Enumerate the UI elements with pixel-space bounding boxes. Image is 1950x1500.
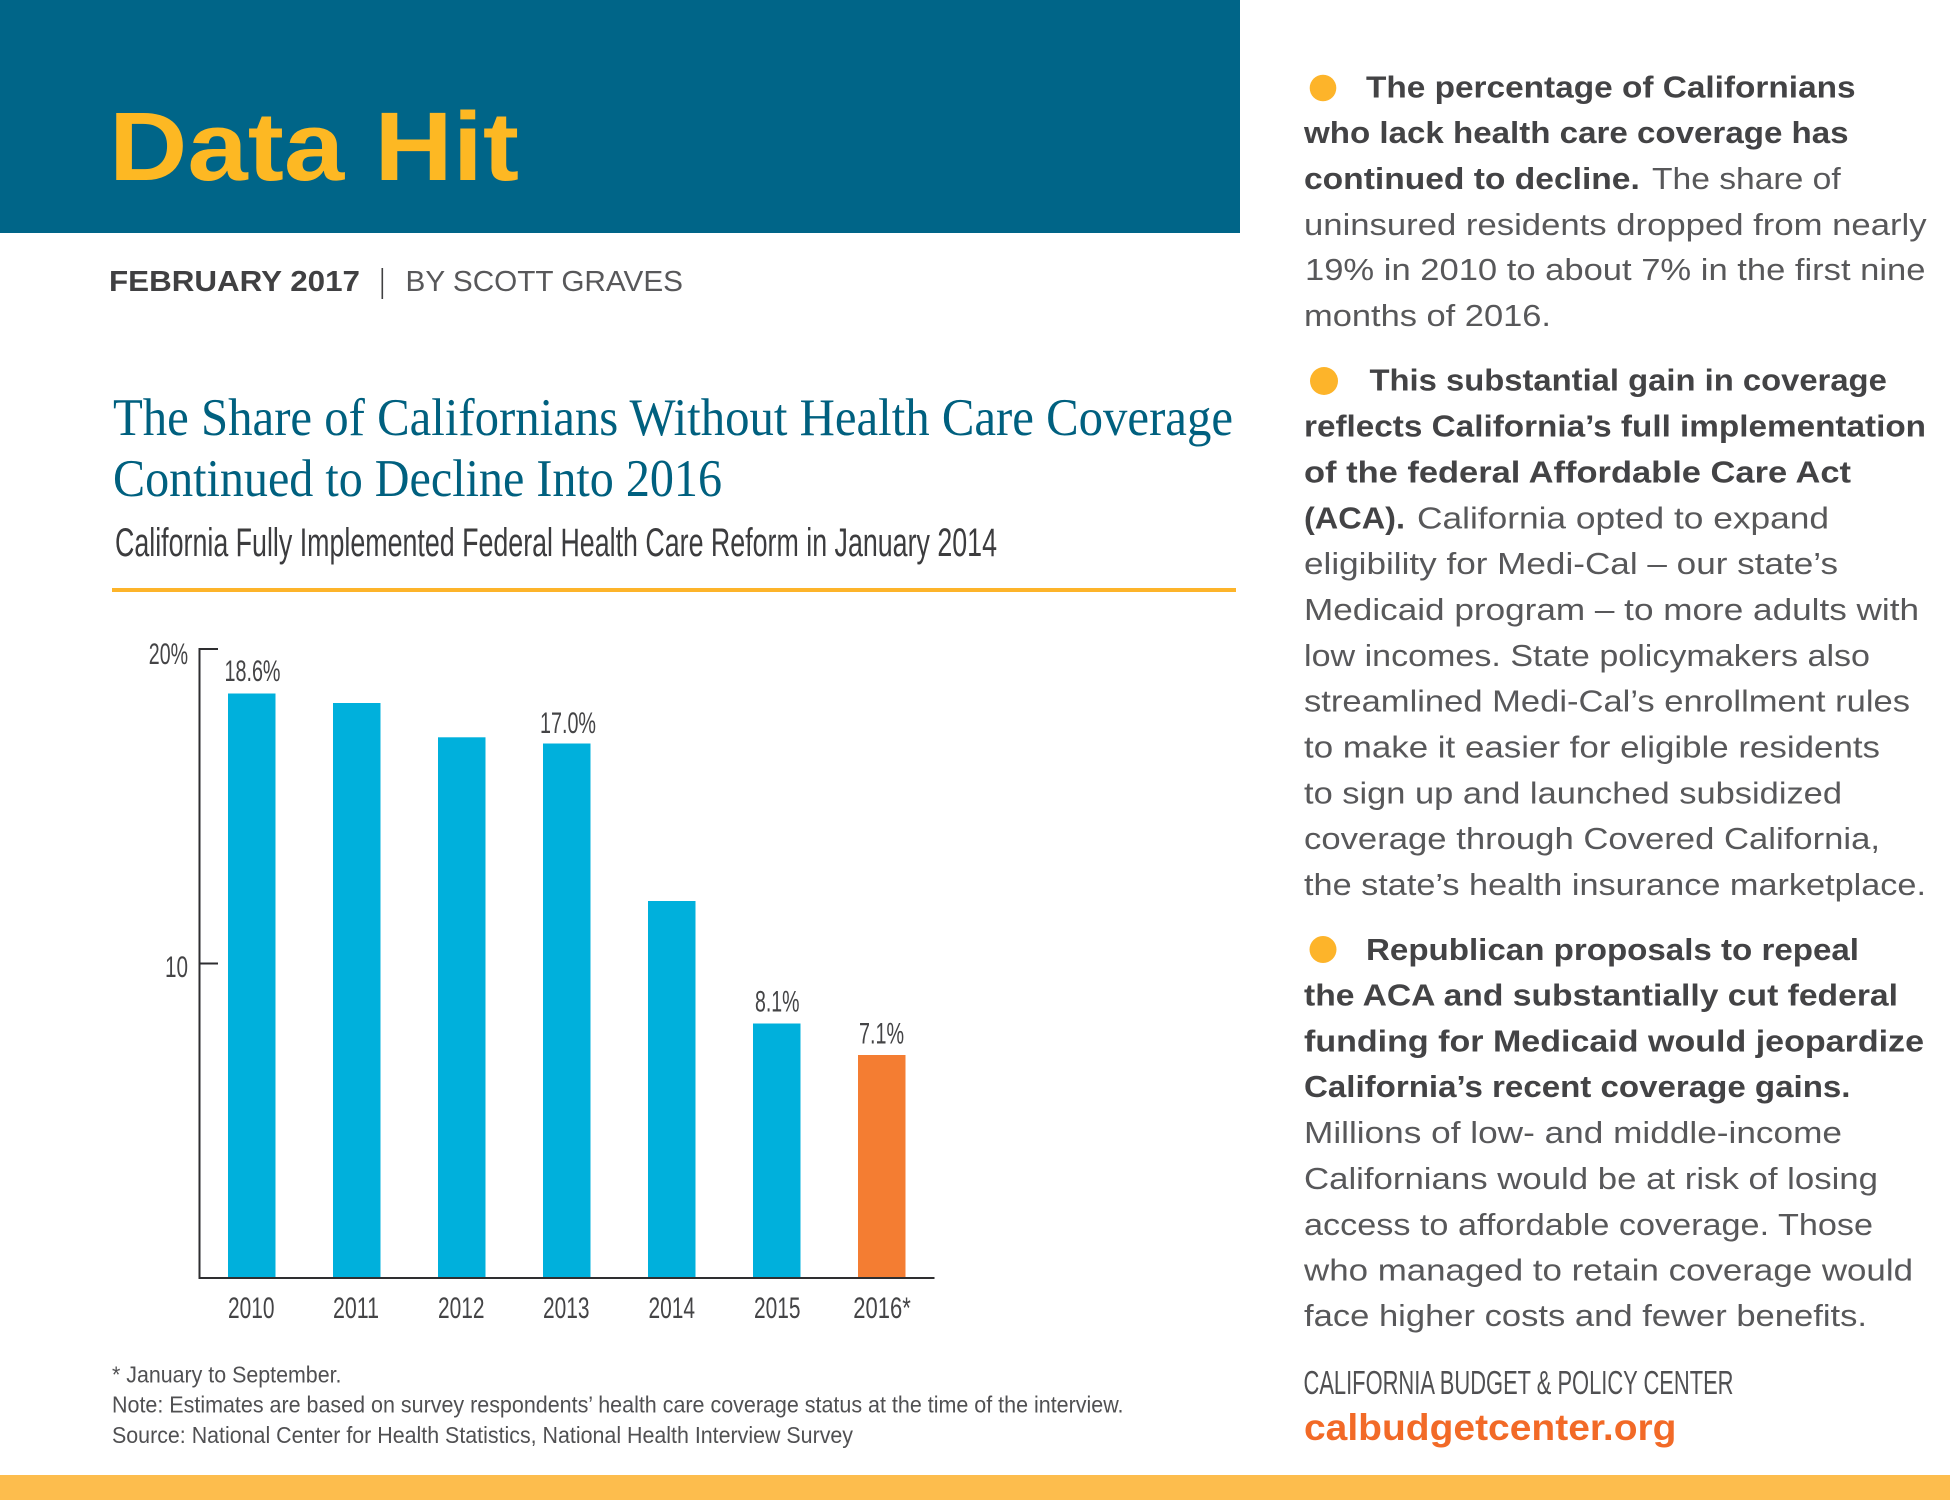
bullet 2 — [1310, 367, 1338, 395]
date and byline: FEBRUARY 2017 — [109, 266, 360, 298]
value labels: 8.1% — [755, 986, 800, 1019]
paragraph 2: the state’s health insurance marketplace. — [1304, 868, 1926, 902]
year labels: 2014 — [648, 1292, 695, 1325]
paragraph 2: Medicaid program – to more adults with — [1304, 593, 1919, 627]
paragraph 3: face higher costs and fewer benefits. — [1304, 1299, 1867, 1333]
paragraph 2: to sign up and launched subsidized — [1304, 776, 1842, 810]
year labels: 2011 — [333, 1292, 379, 1325]
website: calbudgetcenter.org — [1304, 1407, 1676, 1448]
value labels — [224, 655, 904, 1051]
bar chart — [149, 638, 935, 1325]
y axis: 10 — [165, 951, 188, 984]
chart title: Continued to Decline Into 2016 — [113, 450, 722, 508]
footnotes: Source: National Center for Health Statistics, National Health Interview Survey — [112, 1422, 853, 1448]
paragraph 2: coverage through Covered California, — [1304, 822, 1880, 856]
paragraph 3 — [1303, 933, 1924, 1333]
paragraph 2: eligibility for Medi-Cal – our state’s — [1304, 547, 1838, 581]
paragraph 1: continued to decline. — [1304, 162, 1640, 196]
date and byline: BY SCOTT GRAVES — [406, 266, 683, 298]
paragraph 3: Millions of low- and middle-income — [1304, 1116, 1842, 1150]
paragraph 2: of the federal Affordable Care Act — [1304, 455, 1851, 489]
y axis: 20% — [149, 638, 188, 671]
organization name: CALIFORNIA BUDGET & POLICY CENTER — [1304, 1364, 1734, 1401]
footnotes — [112, 1362, 1124, 1448]
year labels: 2012 — [438, 1292, 484, 1325]
value labels: 17.0% — [540, 707, 596, 740]
footnotes: * January to September. — [112, 1362, 342, 1388]
bars — [228, 694, 906, 1278]
paragraph 1: who lack health care coverage has — [1303, 116, 1849, 150]
paragraph 2: to make it easier for eligible residents — [1304, 730, 1880, 764]
paragraph 2: streamlined Medi-Cal’s enrollment rules — [1304, 685, 1910, 719]
chart subtitle: California Fully Implemented Federal Health Care Reform in January 2014 — [115, 521, 997, 565]
year labels: 2016* — [853, 1292, 911, 1325]
bottom band — [0, 1475, 1950, 1500]
paragraph 2: low incomes. State policymakers also — [1304, 639, 1870, 673]
paragraph 2: (ACA). — [1304, 501, 1405, 535]
bullet 1 — [1310, 75, 1336, 101]
paragraph 3: the ACA and substantially cut federal — [1304, 978, 1898, 1012]
paragraph 3: access to affordable coverage. Those — [1304, 1208, 1873, 1242]
year labels: 2010 — [228, 1292, 274, 1325]
paragraph 1: The share of — [1652, 162, 1841, 196]
paragraph 3: funding for Medicaid would jeopardize — [1304, 1024, 1924, 1058]
paragraph 3: Republican proposals to repeal — [1366, 933, 1859, 967]
paragraph 2: This substantial gain in coverage — [1370, 364, 1887, 398]
paragraph 1: months of 2016. — [1304, 299, 1551, 333]
chart title: The Share of Californians Without Health Care Coverage — [113, 389, 1233, 447]
chart title — [113, 389, 1233, 508]
paragraph 1 — [1303, 70, 1927, 333]
bullet 3 — [1310, 936, 1336, 963]
paragraph 3: California’s recent coverage gains. — [1304, 1070, 1850, 1104]
year labels: 2015 — [754, 1292, 800, 1325]
year labels — [228, 1292, 911, 1325]
year labels: 2013 — [543, 1292, 590, 1325]
header banner — [0, 0, 1240, 233]
value labels: 7.1% — [859, 1018, 904, 1051]
value labels: 18.6% — [224, 655, 280, 688]
x axis — [198, 1277, 934, 1279]
paragraph 3: who managed to retain coverage would — [1303, 1254, 1913, 1288]
paragraph 3: Californians would be at risk of losing — [1304, 1162, 1878, 1196]
paragraph 2: reflects California’s full implementation — [1304, 410, 1926, 444]
date and byline — [109, 266, 683, 299]
paragraph 2: California opted to expand — [1417, 501, 1829, 535]
y axis — [149, 638, 218, 1278]
footnotes: Note: Estimates are based on survey respondents’ health care coverage status at the time of the interview. — [112, 1392, 1124, 1418]
paragraph 2 — [1304, 364, 1926, 902]
paragraph 1: uninsured residents dropped from nearly — [1304, 208, 1927, 242]
paragraph 1: 19% in 2010 to about 7% in the first nine — [1305, 253, 1926, 287]
title: Data Hit — [109, 92, 519, 201]
paragraph 1: The percentage of Californians — [1366, 70, 1856, 104]
